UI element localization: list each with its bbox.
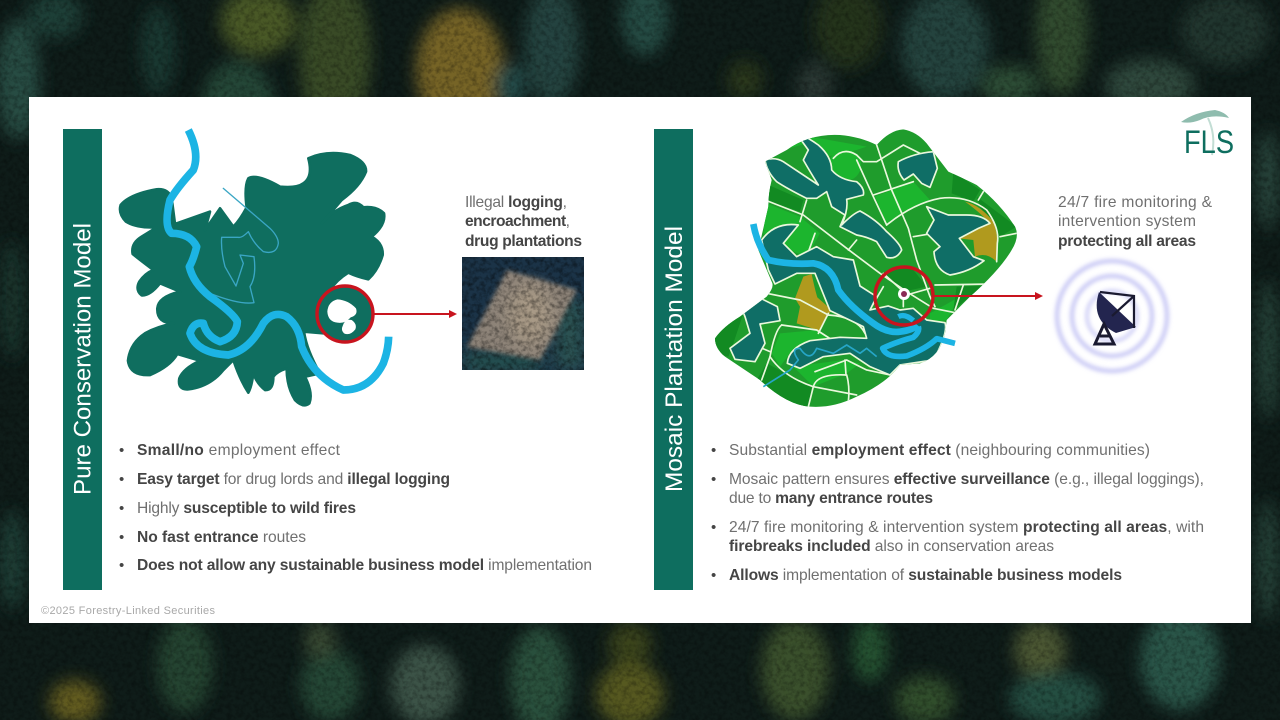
bullet list: mosaic benefits: • [711,567,716,584]
bullet list: conservation drawbacks: • [119,500,124,517]
logo: FLS [1181,110,1234,160]
panel: mosaic plantation model: protecting all areas [1058,233,1196,250]
icon: satellite dish with signal rings [1057,261,1167,371]
photo: deforested patch [462,257,585,374]
bullet list: conservation drawbacks [119,442,592,574]
bullet list: conservation drawbacks: • [119,442,124,459]
callout text: fire monitoring: 24/7 fire monitoring & [1058,194,1213,211]
river and stream [753,224,955,387]
vertical heading: mosaic plantation model [654,129,693,590]
map: conservation forest with river [120,130,389,405]
bullet list: conservation drawbacks: Highly susceptible to wild fires [137,500,356,517]
bullet list: mosaic benefits: Allows implementation of sustainable business models [729,567,1122,584]
panel: pure conservation model: drug plantations [465,233,582,250]
bullet list: mosaic benefits [711,442,1204,584]
bullet list: mosaic benefits: • [711,519,716,536]
callout text: illegal logging: Illegal logging, [465,194,567,211]
panel: mosaic plantation model: intervention system [1058,213,1196,230]
monitoring ring and arrow [875,267,1043,325]
patch inside callout ring [318,287,372,341]
olive cells [795,274,832,331]
bullet list: conservation drawbacks: Easy target for drug lords and illegal logging [137,471,450,488]
panel: pure conservation model [63,129,592,590]
white clearing [327,299,357,334]
callout ring and arrow [317,286,457,342]
panel: mosaic plantation model [654,120,1213,590]
plantation cells [715,129,1017,407]
map: mosaic plantation [715,129,1017,407]
bullet list: conservation drawbacks: Small/no employment effect [137,442,341,459]
white firebreak roads [758,145,1017,407]
vertical heading: pure conservation model [63,129,102,590]
vertical heading: mosaic plantation model: Mosaic Plantation Model [662,226,688,492]
bullet list: conservation drawbacks: Does not allow any sustainable business model implementation [137,557,592,574]
vertical heading: pure conservation model: Pure Conservation Model [70,223,96,495]
bullet list: conservation drawbacks: • [119,529,124,546]
logo: FLS: FLS [1184,124,1234,160]
bullet list: conservation drawbacks: • [119,471,124,488]
panel: pure conservation model: encroachment, [465,213,570,230]
bullet list: mosaic benefits: 24/7 fire monitoring & intervention system protecting all areas, with [729,519,1204,536]
conservation corridors [730,132,990,375]
bullet list: mosaic benefits: • [711,471,716,488]
bullet list: mosaic benefits: Substantial employment effect (neighbouring communities) [729,442,1150,459]
bullet list: conservation drawbacks: • [119,557,124,574]
bullet list: mosaic benefits: due to many entrance routes [729,490,933,507]
forest area [120,153,384,405]
bullet list: conservation drawbacks: No fast entrance routes [137,529,306,546]
thin stream [167,130,389,390]
bullet list: mosaic benefits: Mosaic pattern ensures effective surveillance (e.g., illegal loggings), [729,471,1204,488]
bullet list: mosaic benefits: firebreaks included also in conservation areas [729,538,1054,555]
main river [167,130,389,390]
copyright footer: ©2025 Forestry-Linked Securities [41,605,216,617]
bullet list: mosaic benefits: • [711,442,716,459]
white content panel [29,97,1251,623]
